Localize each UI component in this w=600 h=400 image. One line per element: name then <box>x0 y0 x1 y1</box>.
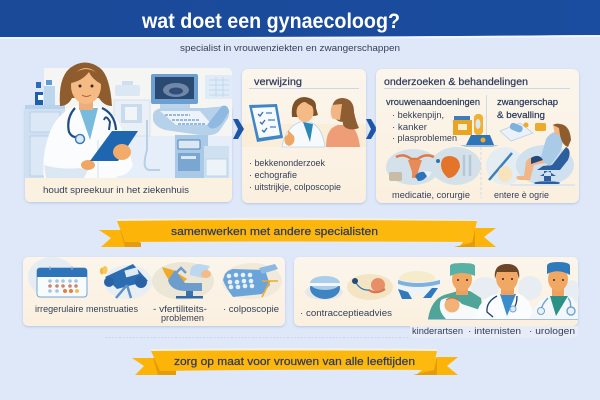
icon: medication box <box>453 114 483 135</box>
subheading: vrouwenaandoeningen: vrouwenaandoeningen <box>386 97 480 108</box>
caption: medicatie: medicatie, corurgie <box>392 190 470 200</box>
heading: onderzoeken & behandelingen <box>384 76 528 88</box>
caption: entere: entere è ogrie <box>494 190 549 200</box>
text block: conditions: · kanker <box>392 122 427 132</box>
panel: onderzoeken en behandelingen <box>376 69 579 203</box>
label: contraceptieadvies: · contracceptieadvies <box>300 308 393 318</box>
text block: conditions: · bekkenpijn, <box>392 110 444 120</box>
label: irregulaire menstruaties: irregerulaire menstruaties <box>35 304 138 314</box>
doctor: surgeon with baby <box>428 263 484 319</box>
label: urologen: · urologen <box>529 326 575 336</box>
label: colposcopie: · colposcopie <box>223 304 279 314</box>
illustration: doctor <box>43 62 138 178</box>
ribbon: samenwerken <box>99 218 496 247</box>
icon: cap <box>460 135 499 147</box>
text block: exams <box>249 158 341 192</box>
panel: contraceptie en specialisten <box>294 257 579 338</box>
icon: uterus <box>386 149 440 185</box>
panel: spreekuur <box>25 62 232 202</box>
ribbon: zorg op maat <box>132 348 458 375</box>
illustration: specialists <box>428 262 579 320</box>
label: fertiliteit: - vfertiliteits- <box>153 304 207 314</box>
subheading: bevalling: & bevalling <box>497 110 545 121</box>
arrow: to verwijzing <box>233 119 244 139</box>
icon: wall items <box>114 75 232 136</box>
text block: exams: · uitstrijkje, colposcopie <box>249 182 341 192</box>
icon: contraception disc <box>305 276 343 300</box>
illustration: doctor and patient <box>282 97 360 147</box>
header banner <box>0 0 600 39</box>
text block: conditions: · plasproblemen <box>392 133 457 143</box>
title: wat doet een gynaecoloog? <box>141 9 400 33</box>
heading: verwijzing <box>254 76 302 88</box>
ribbon: samenwerken: samenwerken met andere specialisten <box>171 226 378 238</box>
illustration: patient in chair <box>516 124 574 185</box>
text block: conditions <box>392 110 457 143</box>
subheading: zwangerschap: zwangerschap <box>497 97 558 108</box>
subtitle: specialist in vrouwenziekten en zwangerschappen <box>180 43 400 54</box>
panel: spreekuur: houdt spreekuur in het ziekenhuis <box>43 185 190 195</box>
icon: calendar <box>28 257 87 297</box>
label: kinderartsen: kinderartsen <box>412 326 463 336</box>
doctor: uroloog <box>530 262 578 319</box>
icon: cabinet and bottles <box>25 80 65 178</box>
icon: small supplies <box>500 122 546 141</box>
icon: exam chair <box>152 262 214 300</box>
doctor: internist <box>475 264 534 319</box>
icon: instrument <box>486 147 524 185</box>
label: problemen: problemen <box>161 313 204 323</box>
icon: organ <box>431 147 481 185</box>
panel: verwijzing <box>242 69 366 203</box>
label: internisten: · internisten <box>468 326 521 336</box>
icon: underwear <box>398 271 441 299</box>
icon: telescope <box>100 264 152 299</box>
ribbon: zorg op maat: zorg op maat voor vrouwen van alle leeftijden <box>174 356 415 368</box>
icon: ultrasound baby <box>347 274 393 300</box>
arrow: to onderzoeken <box>366 119 377 139</box>
text block: exams: · bekkenonderzoek <box>249 158 325 168</box>
icon: contraceptive pack and iud <box>222 263 282 299</box>
icon: ultrasound machine <box>145 74 229 178</box>
icon: checklist <box>249 104 283 142</box>
caption <box>25 178 232 202</box>
text block: exams: · echografie <box>249 170 297 180</box>
panel: aandoeningen <box>23 257 285 326</box>
